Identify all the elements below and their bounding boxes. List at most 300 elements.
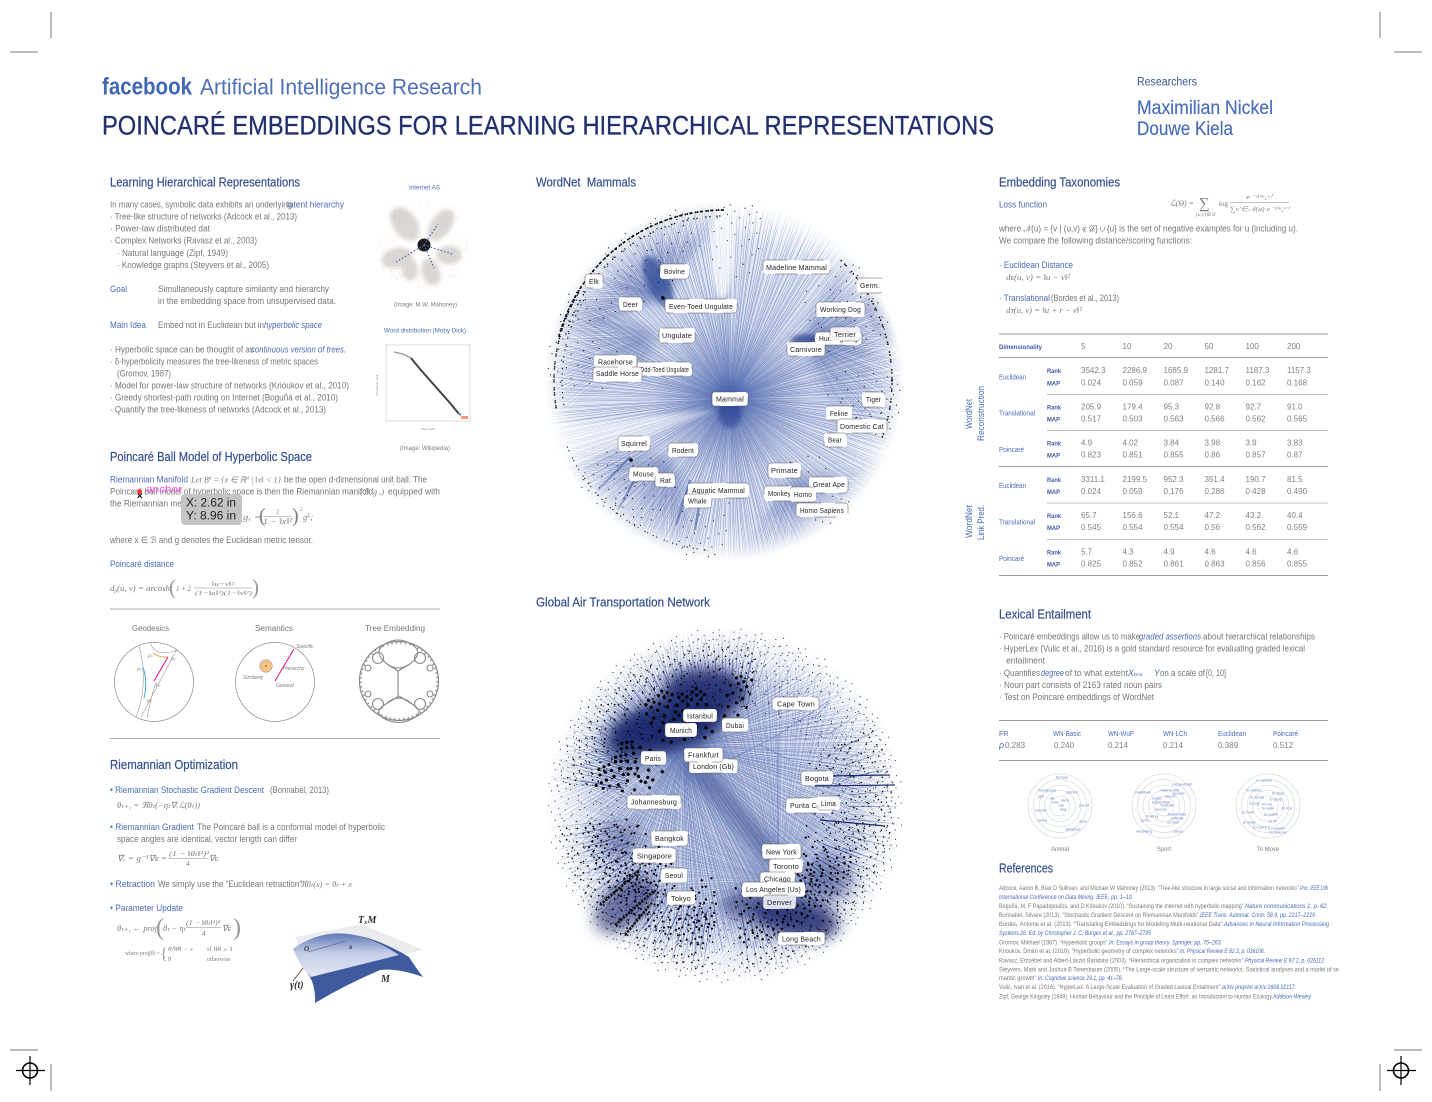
text block: Riemannian gradient bbox=[110, 822, 386, 868]
chart: sport concentric hierarchy: tennis bbox=[1165, 794, 1175, 798]
caption: internet AS: Internet AS bbox=[409, 184, 440, 192]
text block: Riemannian manifold: = {x ∈ ℝ bbox=[211, 474, 248, 484]
node labels: mammals: Carnivore bbox=[790, 347, 822, 354]
chart: to move concentric hierarchy: to walk bbox=[1262, 806, 1274, 810]
chart: to move concentric hierarchy: to swerve bbox=[1269, 830, 1287, 834]
diagram: tangent space on manifold: M bbox=[380, 974, 391, 985]
text block: reference list: In: Essays in group theory. Springer, pp. 75–263. bbox=[1109, 940, 1222, 946]
table: reconstruction and link prediction results: 92.8 bbox=[1204, 402, 1221, 412]
authors block: Douwe Kiela bbox=[1137, 119, 1233, 140]
chart: to move concentric hierarchy: to sprint bbox=[1250, 794, 1265, 800]
node labels: mammals: Tiger bbox=[866, 397, 881, 404]
text block: translational: (Bordes et al., 2013) bbox=[1051, 293, 1119, 303]
table: reconstruction and link prediction results: 0.024 bbox=[1081, 378, 1102, 388]
text block: lexical entailment bullets: of to what extent bbox=[1065, 668, 1129, 678]
table: reconstruction and link prediction results: 0.825 bbox=[1081, 560, 1102, 568]
text block: parameter update: 4 bbox=[202, 930, 206, 938]
authors block: Maximilian Nickel bbox=[1137, 98, 1273, 119]
node labels: mammals: Terrier bbox=[834, 332, 856, 339]
table: reconstruction and link prediction results: 1157.3 bbox=[1287, 366, 1311, 375]
panel: Riemannian Optimization bbox=[110, 758, 423, 1003]
text block: Riemannian manifold: 2 bbox=[300, 507, 303, 513]
panel: Embedding Taxonomies bbox=[964, 176, 1328, 576]
text block: introduction bullets: In many cases, symbolic data exhibits an underlying bbox=[110, 200, 292, 210]
node labels: mammals: Ungulate bbox=[662, 333, 692, 340]
chart: to move concentric hierarchy: to trot bbox=[1282, 806, 1293, 810]
table: reconstruction and link prediction results: 205.9 bbox=[1081, 402, 1102, 412]
table: reconstruction and link prediction results: 81.5 bbox=[1287, 475, 1303, 484]
table: reconstruction and link prediction results: 52.1 bbox=[1164, 511, 1180, 520]
text block: reference list: Gromov, Mikhael (1987). “Hyperbolic groups”. bbox=[999, 940, 1109, 946]
table: reconstruction and link prediction results: MAP bbox=[1047, 562, 1061, 568]
chart: sport concentric hierarchy: handball bbox=[1135, 790, 1151, 794]
chart: to move concentric hierarchy: to wander bbox=[1268, 826, 1286, 830]
text block: lexical entailment bullets: on a scale of bbox=[1160, 668, 1205, 678]
node labels: mammals: Bovine bbox=[664, 269, 685, 276]
table: reconstruction and link prediction results: Euclidean bbox=[999, 483, 1026, 490]
text block: Riemannian gradient: The Poincaré ball is a conformal model of hyperbolic bbox=[197, 822, 386, 832]
chart: animal concentric hierarchy: mongoose bbox=[1038, 788, 1057, 792]
text block: reference list: Proc. IEEE 13th bbox=[1300, 886, 1328, 892]
text block: Poincaré distance: (1−‖u‖²)(1−‖v‖²) bbox=[195, 590, 252, 597]
table: reconstruction and link prediction results: Rank bbox=[1047, 477, 1061, 484]
table: reconstruction and link prediction results: 92.7 bbox=[1246, 402, 1262, 412]
table: reconstruction and link prediction results: 3311.1 bbox=[1081, 475, 1105, 484]
node labels: airports: Johannesburg bbox=[631, 800, 677, 806]
table: reconstruction and link prediction results: 0.059 bbox=[1122, 487, 1143, 496]
table: reconstruction and link prediction results: 43.2 bbox=[1246, 511, 1262, 520]
node labels: airports: Bangkok bbox=[655, 836, 684, 843]
text block: Riemannian manifold: gₓ = bbox=[243, 512, 261, 522]
text block: Poincaré distance: (u, v) = arcosh bbox=[117, 583, 170, 593]
node labels: airports: Seoul bbox=[665, 873, 683, 880]
node labels: airports: Paris bbox=[645, 756, 661, 763]
text block: Euclidean distance bbox=[999, 260, 1073, 282]
chart: to move concentric hierarchy: to carry bbox=[1253, 824, 1267, 830]
table: Spearman correlation comparison: 0.389 bbox=[1218, 741, 1239, 750]
table: reconstruction and link prediction results: 0.86 bbox=[1204, 450, 1221, 460]
text block: hyperbolic space bullets: (Gromov, 1987) bbox=[117, 368, 171, 378]
text block: introduction bullets: latent hierarchy bbox=[287, 200, 345, 210]
authors block bbox=[1137, 76, 1273, 140]
table: reconstruction and link prediction results: 0.024 bbox=[1081, 487, 1102, 496]
text block: loss function: e⁻ᵈ⁽ᵘ,ᵛ⁾ bbox=[1246, 194, 1274, 201]
table: reconstruction and link prediction results: 3.9 bbox=[1246, 438, 1257, 448]
chart: animal concentric hierarchy: human bbox=[1056, 774, 1068, 780]
table: reconstruction and link prediction results: 0.168 bbox=[1287, 378, 1308, 388]
chart: sport concentric hierarchy: football bbox=[1161, 802, 1174, 808]
heading: embedding taxonomies: Embedding Taxonomies bbox=[999, 176, 1120, 190]
diagram: geodesics: p₄ bbox=[136, 667, 142, 672]
node labels: mammals: Mouse bbox=[633, 472, 654, 478]
text block: introduction bullets: · Knowledge graphs (Steyvers et al., 2005) bbox=[117, 260, 269, 270]
table: reconstruction and link prediction results: 0.428 bbox=[1246, 487, 1266, 496]
table: reconstruction and link prediction results: 0.856 bbox=[1246, 560, 1266, 568]
table: reconstruction and link prediction results: 4.9 bbox=[1164, 548, 1175, 556]
table: reconstruction and link prediction results: 0.162 bbox=[1246, 378, 1266, 388]
text block: main idea: hyperbolic space bbox=[264, 320, 322, 330]
table: reconstruction and link prediction results: 0.861 bbox=[1164, 560, 1184, 568]
node labels: mammals: Great Ape bbox=[813, 482, 845, 489]
callout: anchor marker and tooltip: anchor bbox=[146, 484, 183, 496]
panel: Learning Hierarchical Representations bbox=[110, 176, 470, 452]
text block: Riemannian manifold: the Riemannian me bbox=[110, 498, 182, 508]
chart: word frequency distribution: Frequency rank bbox=[375, 374, 379, 395]
text block: goal: Goal bbox=[110, 284, 127, 294]
table: reconstruction and link prediction results: 200 bbox=[1287, 342, 1301, 351]
text block: Riemannian manifold: g bbox=[303, 512, 307, 522]
diagram: geodesics: p₁ bbox=[155, 683, 161, 688]
table: reconstruction and link prediction results: 952.3 bbox=[1164, 475, 1184, 484]
text block: parameter update: ∇ᴇ bbox=[222, 923, 232, 933]
table: reconstruction and link prediction results: 3.84 bbox=[1164, 438, 1180, 448]
network chart: global air transportation embedding bbox=[548, 628, 902, 983]
text block: goal: in the embedding space from unsupervised data. bbox=[158, 296, 336, 306]
table: reconstruction and link prediction results: 0.562 bbox=[1246, 523, 1266, 532]
chart: animal concentric hierarchy: duck bbox=[1061, 798, 1069, 802]
text block: lexical entailment bullets: · Quantifies bbox=[999, 668, 1041, 678]
caption: image credit Wikipedia: (Image: Wikipedia) bbox=[400, 445, 450, 452]
diagram: semantics bbox=[236, 624, 314, 722]
node labels: airports: Munich bbox=[670, 728, 692, 735]
table: Spearman correlation comparison: ρ bbox=[998, 740, 1004, 750]
text block: Riemannian manifold: (ℬ, g ₓ) bbox=[360, 486, 384, 496]
text block: hyperbolic space bullets: · Hyperbolic space can be thought of as bbox=[110, 344, 255, 354]
chart: animal concentric hierarchy: mouse bbox=[1035, 808, 1048, 812]
row group label: WordNet link prediction: Link Pred. bbox=[976, 505, 986, 540]
table: reconstruction and link prediction results: 351.4 bbox=[1204, 475, 1225, 484]
table: reconstruction and link prediction results: 0.56 bbox=[1204, 523, 1221, 532]
text block: Euclidean distance: · Euclidean Distance bbox=[999, 260, 1073, 270]
node labels: mammals: Whale bbox=[688, 498, 707, 506]
table: reconstruction and link prediction results: MAP bbox=[1047, 380, 1061, 388]
node labels: airports: New York bbox=[766, 850, 797, 856]
chart: animal concentric hierarchy: ostrich bbox=[1066, 790, 1078, 794]
chart: to move concentric hierarchy: to sit bbox=[1269, 818, 1278, 824]
text block: lexical entailment bullets: · Test on Poincaré embeddings of WordNet bbox=[999, 692, 1155, 702]
table: reconstruction and link prediction results: 2199.5 bbox=[1122, 475, 1148, 484]
text block: Riemannian manifold: Riemannian Manifold bbox=[110, 474, 188, 484]
node labels: mammals: Rat bbox=[660, 478, 671, 485]
text block: Euclidean distance: dᴇ(u, v) = ‖u − v‖² bbox=[1006, 272, 1070, 282]
text block: lexical entailment bullets: about hierarchical relationships bbox=[1203, 632, 1316, 642]
node labels: mammals: Even-Toed Ungulate bbox=[669, 304, 733, 311]
text block: Riemannian manifold: ; bbox=[310, 512, 313, 522]
callout: anchor marker and tooltip: Y: 8.96 in bbox=[186, 510, 236, 522]
text block: translational: · Translational bbox=[999, 293, 1050, 303]
chart: sport concentric hierarchy: soccer bbox=[1155, 806, 1168, 812]
chart: sport concentric hierarchy: badminton bbox=[1161, 788, 1179, 792]
diagram: tree embedding bbox=[360, 624, 438, 722]
node labels: mammals: Homo bbox=[794, 492, 812, 499]
chart: word frequency distribution: Word rank bbox=[421, 427, 435, 431]
text block: Riemannian gradient: (1 − ‖θₜ‖²)² bbox=[169, 849, 210, 858]
text block: parameter update: { bbox=[160, 946, 168, 963]
chart: to move concentric hierarchy: to bow bbox=[1242, 810, 1254, 814]
diagram: semantics: Hierarchy bbox=[283, 666, 305, 672]
node labels: mammals: Primate bbox=[771, 468, 798, 475]
chart: animal concentric hierarchy: cow bbox=[1051, 800, 1059, 804]
node labels: mammals: Squirrel bbox=[621, 441, 647, 448]
diagram: geodesics bbox=[114, 624, 194, 722]
text block: reference list: Advances in Neural Information Processing bbox=[1223, 922, 1330, 928]
node labels: mammals: Racehorse bbox=[598, 360, 633, 366]
chart: to move concentric hierarchy: to step bbox=[1272, 790, 1285, 796]
table: reconstruction and link prediction results: Dimensionality bbox=[999, 344, 1042, 351]
text block: loss function: ∑v′∈𝒩(u) e⁻ᵈ⁽ᵘ,ᵛ′⁾ bbox=[1230, 206, 1291, 213]
node labels: airports: Singapore bbox=[637, 854, 672, 860]
table: reconstruction and link prediction results: 3.98 bbox=[1204, 438, 1221, 448]
table: reconstruction and link prediction results: 10 bbox=[1122, 342, 1132, 351]
text block: lexical entailment bullets: X bbox=[1127, 668, 1135, 678]
text block: reference list: Krioukov, Dmitri et al. (2010). “Hyperbolic geometry of complex networks”. bbox=[999, 949, 1180, 955]
text block: Poincaré distance: 1 + 2 bbox=[176, 583, 192, 593]
text block: introduction bullets: · Tree-like structure of networks (Adcock et al., 2013) bbox=[110, 212, 297, 222]
text block: Riemannian manifold: E bbox=[306, 514, 310, 519]
chart: animal concentric hierarchy: Animal bbox=[1051, 846, 1069, 853]
table: reconstruction and link prediction results: 0.857 bbox=[1246, 450, 1266, 460]
table: Spearman correlation comparison: 0.214 bbox=[1108, 741, 1129, 750]
diagram: semantics: Specific bbox=[296, 644, 314, 650]
text block: loss function: We compare the following distance/scoring functions: bbox=[999, 236, 1192, 246]
chart: animal concentric hierarchy bbox=[1028, 774, 1092, 853]
table: reconstruction and link prediction results: Translational bbox=[999, 410, 1035, 418]
chart: sport concentric hierarchy: racquetball bbox=[1172, 782, 1192, 786]
table: reconstruction and link prediction results: 0.87 bbox=[1287, 450, 1303, 460]
text block: parameter update: ) bbox=[233, 915, 241, 941]
chart: sport concentric hierarchy: basketball bbox=[1168, 812, 1186, 816]
table: Spearman correlation comparison: WN-WuP bbox=[1108, 731, 1134, 738]
text block: Riemannian manifold: where x ∈ ℬ and g denotes the Euclidean metric tensor. bbox=[109, 535, 313, 545]
text block: loss function: where 𝒩(u) = {v | (u,v) ∉ 𝒟} ∪ {u} is the set of negative examples for u (including u). bbox=[998, 224, 1298, 234]
text block: reference list: arXiv preprint arXiv:1608.02117. bbox=[1222, 985, 1296, 991]
chart: sport concentric hierarchy: wrestling bbox=[1136, 828, 1152, 834]
chart: sport concentric hierarchy: soccer bbox=[1173, 790, 1186, 796]
text block: loss function: (u,v)∈𝒟 bbox=[1196, 211, 1217, 218]
caption: image credit Mahoney: (Image: M.W. Mahoney) bbox=[394, 302, 457, 308]
table: reconstruction and link prediction results: 1187.3 bbox=[1246, 366, 1270, 375]
text block: Riemannian manifold: Poincaré ball model of hyperbolic space is then the Riemannian manifold bbox=[110, 486, 373, 496]
table: reconstruction and link prediction results: 0.823 bbox=[1081, 450, 1102, 460]
node labels: mammals: Germ. bbox=[860, 283, 880, 290]
table: reconstruction and link prediction results: MAP bbox=[1047, 489, 1061, 496]
text block: reference list: Bonnabel, Silvere (2013). “Stochastic Gradient Descent on Riemannian Manifolds”. bbox=[999, 913, 1200, 919]
heading: Riemannian optimization: Riemannian Optimization bbox=[110, 758, 238, 772]
table: reconstruction and link prediction results: 0.562 bbox=[1246, 414, 1266, 424]
chart: sport concentric hierarchy: chess bbox=[1173, 828, 1183, 834]
text block: loss function: log bbox=[1219, 200, 1228, 208]
text block: Riemannian manifold: d bbox=[209, 476, 212, 482]
text block: lexical entailment bullets: is-a bbox=[1134, 672, 1142, 678]
text block: goal bbox=[110, 284, 336, 306]
text block: Riemannian gradient: • Riemannian Gradient bbox=[110, 822, 195, 832]
row group label: WordNet link prediction: WordNet bbox=[964, 504, 974, 538]
text block: introduction bullets bbox=[110, 200, 345, 270]
table: reconstruction and link prediction results: 0.554 bbox=[1164, 523, 1184, 532]
node labels: mammals: Domestic Cat bbox=[840, 424, 884, 431]
text block: Poincaré distance: Poincaré distance bbox=[110, 559, 174, 569]
text block: Riemannian manifold: Let B bbox=[191, 474, 209, 484]
diagram: geodesics: p₅ bbox=[147, 654, 153, 659]
table: Spearman correlation comparison: 0.214 bbox=[1163, 741, 1184, 750]
diagram: geodesics: p₂ bbox=[170, 657, 176, 662]
table: Spearman correlation comparison bbox=[998, 720, 1328, 760]
chart: to move concentric hierarchy: to crawl bbox=[1264, 812, 1278, 816]
caption: word distribution: Word distribution (Moby Dick) bbox=[384, 328, 466, 334]
text block: reference list: Nature communications 1, p. 62. bbox=[1245, 904, 1328, 910]
node labels: mammals: Mammal bbox=[716, 396, 744, 404]
callout: anchor marker and tooltip: X: 2.62 in bbox=[186, 498, 236, 510]
node labels: mammals: Homo Sapiens bbox=[800, 508, 844, 515]
diagram: tangent space on manifold: O bbox=[304, 945, 309, 953]
table: reconstruction and link prediction results: 91.0 bbox=[1287, 402, 1303, 412]
text block: main idea bbox=[110, 320, 322, 330]
diagram: tangent space on manifold bbox=[290, 915, 423, 1003]
text block: Poincaré distance: p bbox=[113, 590, 118, 594]
table: reconstruction and link prediction results: 0.855 bbox=[1164, 450, 1184, 460]
diagram: semantics: Similarity bbox=[243, 675, 264, 681]
text block: hyperbolic space bullets: · Model for power-law structure of networks (Krioukov et al., 2010) bbox=[110, 380, 349, 390]
text block: Poincaré distance: ‖u−v‖² bbox=[212, 581, 235, 588]
node labels: airports: London (Gb) bbox=[693, 764, 734, 771]
callout: anchor marker and tooltip bbox=[137, 484, 242, 525]
chart: sport concentric hierarchy: rugby bbox=[1152, 796, 1162, 800]
diagram: tangent space on manifold: x bbox=[348, 943, 353, 951]
heading: learning hierarchical representations: Learning Hierarchical Representations bbox=[110, 176, 300, 190]
node labels: airports: Bogota bbox=[805, 776, 829, 783]
text block: goal: Simultaneously capture similarity and hierarchy bbox=[158, 284, 330, 294]
heading: global air transportation network: Global Air Transportation Network bbox=[536, 596, 711, 610]
table: reconstruction and link prediction results: Rank bbox=[1047, 404, 1061, 412]
table: reconstruction and link prediction results: 0.059 bbox=[1122, 378, 1143, 388]
text block: hyperbolic space bullets: · δ-hyperbolicity measures the tree-likeness of metric spaces bbox=[110, 356, 319, 366]
table: reconstruction and link prediction results: 0.563 bbox=[1164, 414, 1184, 424]
table: Spearman correlation comparison: 0.512 bbox=[1273, 741, 1294, 750]
table: reconstruction and link prediction results: 4.9 bbox=[1081, 438, 1093, 448]
node labels: mammals: Saddle Horse bbox=[596, 371, 639, 378]
node labels: mammals: Deer bbox=[623, 302, 638, 309]
table: reconstruction and link prediction results: 5 bbox=[1081, 342, 1086, 351]
node labels: airports: Frankfurt bbox=[688, 752, 719, 760]
table: reconstruction and link prediction results: 50 bbox=[1204, 342, 1214, 351]
table: Spearman correlation comparison: WN-LCh bbox=[1163, 731, 1187, 738]
header: Facebook AI Research logo line: Artificial Intelligence Research bbox=[200, 74, 482, 100]
text block: loss function bbox=[998, 194, 1298, 246]
text block: reference list: mantic growth”. bbox=[999, 976, 1038, 982]
node labels: airports: Dubai bbox=[726, 723, 744, 730]
text block: retraction: We simply use the “Euclidean retraction” bbox=[158, 879, 302, 889]
text block: lexical entailment bullets: [0, 10] bbox=[1206, 668, 1226, 678]
chart: animal concentric hierarchy: seal bbox=[1079, 818, 1087, 824]
table: reconstruction and link prediction results: 1685.9 bbox=[1164, 366, 1189, 375]
chart: sport concentric hierarchy: boxing bbox=[1146, 814, 1158, 818]
text block: RSGD bbox=[110, 785, 329, 810]
chart: to move concentric hierarchy: to run bbox=[1262, 802, 1272, 806]
diagram: semantics: General bbox=[276, 683, 295, 689]
network chart: WordNet mammals embedding bbox=[546, 203, 902, 559]
diagram: tangent space on manifold: γ(t) bbox=[290, 980, 304, 991]
table: Spearman correlation comparison: Poincaré bbox=[1273, 731, 1298, 738]
heading: references: References bbox=[999, 862, 1053, 876]
text block: Riemannian manifold: | ‖x‖ < 1} bbox=[249, 474, 282, 484]
text block: hyperbolic space bullets: · Quantify the tree-likeness of networks (Adcock et al., 2013) bbox=[110, 404, 326, 414]
table: reconstruction and link prediction results: 0.855 bbox=[1287, 560, 1308, 568]
table: reconstruction and link prediction results: 0.503 bbox=[1122, 414, 1143, 424]
diagram: tangent space on manifold: TₓM bbox=[358, 915, 378, 926]
chart: sport concentric hierarchy bbox=[1132, 774, 1196, 853]
text block: Poincaré distance: ( bbox=[169, 575, 176, 599]
chart: animal concentric hierarchy: parrot bbox=[1079, 802, 1090, 808]
chart: word frequency distribution bbox=[375, 345, 470, 431]
table: reconstruction and link prediction results: Rank bbox=[1047, 550, 1061, 556]
table: Spearman correlation comparison: WN-Basic bbox=[1053, 731, 1081, 738]
table: reconstruction and link prediction results: 0.554 bbox=[1122, 523, 1143, 532]
table: reconstruction and link prediction results: 40.4 bbox=[1287, 511, 1303, 520]
chart: sport concentric hierarchy: Sport bbox=[1157, 846, 1171, 853]
text block: Poincaré distance bbox=[110, 559, 259, 599]
node labels: airports: Punta Cana bbox=[790, 803, 829, 810]
text block: translational bbox=[999, 293, 1119, 315]
table: reconstruction and link prediction results bbox=[999, 334, 1328, 576]
text block: parameter update: θₜ − ηₜ bbox=[163, 923, 186, 933]
text block: Riemannian manifold: equipped with bbox=[388, 486, 440, 496]
heading: WordNet mammals: WordNet Mammals bbox=[536, 176, 636, 190]
node labels: mammals: Hunting Dog bbox=[819, 336, 858, 343]
node labels: mammals: Odd-Toed Ungulate bbox=[640, 367, 689, 374]
text block: parameter update: θ bbox=[168, 957, 171, 963]
panel: references bbox=[999, 862, 1340, 1000]
panel: Poincaré Ball Model bbox=[109, 450, 440, 738]
text block: reference list: Physical Review E 67.2, p. 026112 bbox=[1245, 958, 1325, 964]
text block: parameter update: • Parameter Update bbox=[110, 903, 183, 913]
table: reconstruction and link prediction results: 3.83 bbox=[1287, 438, 1303, 448]
text block: RSGD: • Riemannian Stochastic Gradient Descent bbox=[110, 785, 265, 795]
chart: to move concentric hierarchy: To Move bbox=[1257, 846, 1279, 853]
text block: Riemannian manifold: 1 − ‖x‖² bbox=[263, 516, 293, 526]
text block: RSGD: θₜ₊₁ = ℜθₜ(−ηₜ∇ᵣℒ(θₜ)) bbox=[117, 800, 200, 810]
text block: main idea: Embed not in Euclidean but in bbox=[158, 320, 264, 330]
chart: to move concentric hierarchy bbox=[1236, 774, 1300, 853]
table: reconstruction and link prediction results: 0.565 bbox=[1287, 414, 1308, 424]
table: reconstruction and link prediction results: Rank bbox=[1047, 513, 1061, 520]
table: reconstruction and link prediction results: 0.517 bbox=[1081, 414, 1102, 424]
text block: reference list: Steyvers, Mark and Joshua B Tenenbaum (2005). “The Large-scale structure of semantic networks: Statistical analyses and a model of se bbox=[999, 968, 1340, 974]
text block: lexical entailment bullets: graded assertions bbox=[1139, 632, 1202, 642]
table: reconstruction and link prediction results: Rank bbox=[1047, 368, 1061, 375]
text block: Poincaré distance: d bbox=[110, 583, 114, 593]
header: Facebook AI Research logo line bbox=[102, 74, 482, 100]
text block: reference list: International Conference on Data Mining. IEEE, pp. 1–10. bbox=[999, 895, 1133, 901]
text block: parameter update: ( bbox=[156, 915, 164, 941]
table: reconstruction and link prediction results: 3542.3 bbox=[1081, 366, 1106, 375]
table: reconstruction and link prediction results: 0.140 bbox=[1204, 378, 1225, 388]
row group label: WordNet reconstruction bbox=[964, 386, 986, 441]
table: reconstruction and link prediction results: 4.3 bbox=[1122, 548, 1134, 556]
chart: to move concentric hierarchy: to jog bbox=[1249, 800, 1259, 806]
text block: reference list: IEEE Trans. Automat. Contr. 58.9, pp. 2217–2229 bbox=[1200, 913, 1316, 919]
heading: Poincaré ball model: Poincaré Ball Model of Hyperbolic Space bbox=[110, 450, 312, 464]
node labels: airports: Denver bbox=[767, 900, 792, 907]
diagram: semantics: Semantics bbox=[255, 624, 293, 633]
text block: loss function: ℒ(Θ) = bbox=[1170, 198, 1194, 208]
text block: reference list bbox=[999, 886, 1340, 1000]
panel: Lexical Entailment bbox=[998, 608, 1328, 853]
chart: sport concentric hierarchy: basketball bbox=[1152, 800, 1170, 804]
text block: Riemannian gradient: space angles are identical, vector length can differ bbox=[117, 834, 297, 844]
chart: to move concentric hierarchy: to switch bbox=[1246, 788, 1262, 792]
table: reconstruction and link prediction results: MAP bbox=[1047, 525, 1061, 532]
table: reconstruction and link prediction results: 190.7 bbox=[1246, 475, 1266, 484]
